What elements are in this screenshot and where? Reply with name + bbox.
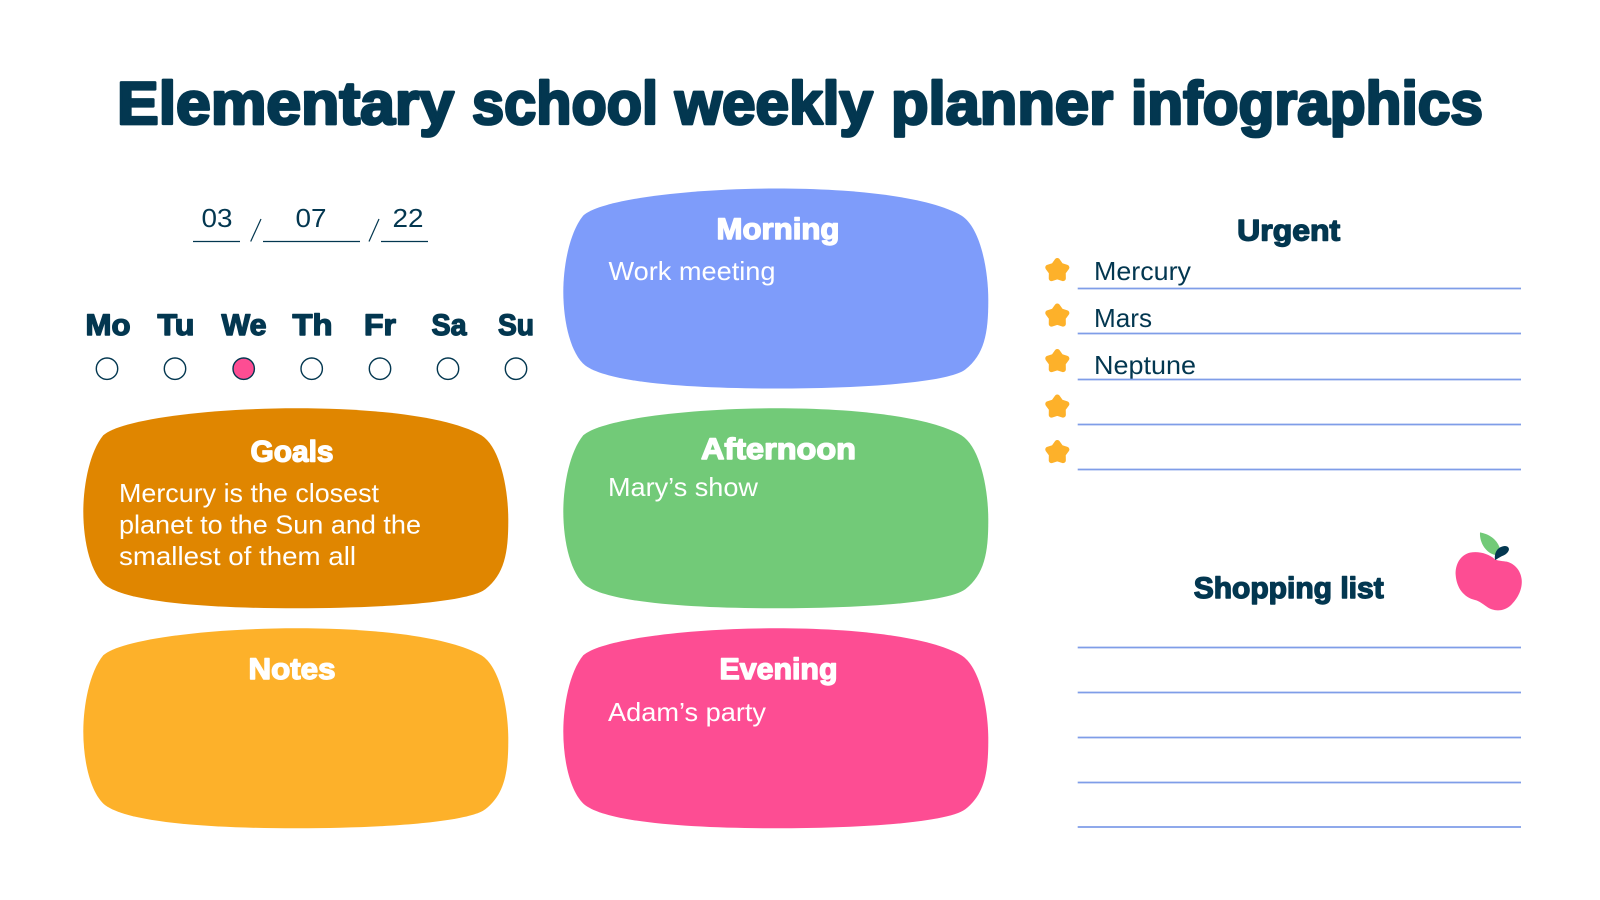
notes heading: Notes <box>248 653 336 686</box>
panel: evening <box>563 628 988 828</box>
morning text: Work meeting <box>608 256 776 286</box>
urgent items: Neptune <box>1094 350 1196 380</box>
panel: morning <box>563 188 988 388</box>
weekday labels: Tu <box>158 309 194 342</box>
goals text: Mercury is the closest <box>119 478 380 508</box>
weekday circles <box>96 358 527 379</box>
evening text: Adam’s party <box>608 697 766 727</box>
urgent items: Mars <box>1094 303 1152 333</box>
title: Elementary <box>117 70 455 137</box>
title: school <box>472 70 658 137</box>
goals text <box>119 478 421 571</box>
urgent items <box>1094 256 1196 380</box>
icon: apple <box>1456 532 1522 610</box>
weekday labels: Mo <box>86 309 130 342</box>
weekday labels: Fr <box>364 309 396 342</box>
afternoon text: Mary’s show <box>608 472 758 502</box>
weekday labels: Su <box>498 309 534 342</box>
icon: star bullets <box>1048 261 1067 460</box>
goals text: smallest of them all <box>119 541 356 571</box>
weekday selector <box>86 309 534 379</box>
evening heading: Evening <box>720 653 838 686</box>
title: planner <box>891 70 1113 137</box>
title: infographics <box>1131 70 1483 137</box>
goals text: planet to the Sun and the <box>119 510 421 540</box>
weekday labels: Th <box>292 309 332 342</box>
panel: urgent list <box>1048 214 1521 470</box>
panel: afternoon <box>563 408 988 608</box>
urgent items: Mercury <box>1094 256 1191 286</box>
date fields <box>193 203 428 242</box>
weekday labels: Sa <box>432 309 467 342</box>
afternoon heading: Afternoon <box>701 433 856 466</box>
weekday labels: We <box>222 309 266 342</box>
panel: shopping list <box>1078 532 1522 827</box>
morning heading: Morning <box>716 213 840 246</box>
goals heading: Goals <box>250 436 334 468</box>
title: weekly <box>674 70 874 137</box>
title <box>117 70 1483 137</box>
panel: notes <box>83 628 508 828</box>
date: year: 22 <box>392 203 424 233</box>
date: month: 07 <box>296 203 326 233</box>
panel: goals <box>83 408 508 608</box>
date: day: 03 <box>202 203 232 233</box>
shopping list heading: Shopping list <box>1194 572 1384 605</box>
weekday labels <box>86 309 534 342</box>
urgent heading: Urgent <box>1237 214 1340 248</box>
